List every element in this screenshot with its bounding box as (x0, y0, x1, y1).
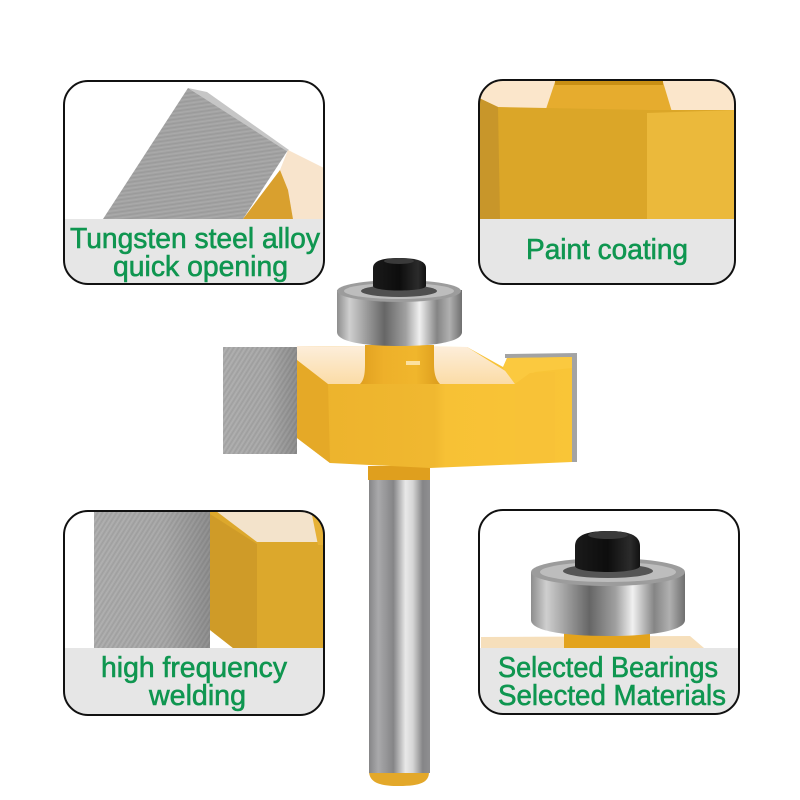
hex bolt (373, 258, 426, 290)
caption: high frequency welding: high frequency (101, 652, 287, 684)
panel: paint coating (479, 80, 735, 284)
caption: tungsten steel alloy quick opening: quick opening (113, 251, 288, 283)
panel: tungsten steel alloy (64, 81, 324, 284)
router bit product (223, 258, 577, 786)
caption: high frequency welding (101, 652, 287, 712)
bearing close-up (531, 531, 685, 636)
yellow neck (360, 345, 440, 384)
panel: high frequency welding (64, 511, 324, 715)
caption: selected bearings selected materials: Selected Bearings (498, 652, 718, 684)
caption: selected bearings selected materials: Selected Materials (498, 680, 726, 712)
yellow neck close-up (545, 82, 672, 112)
yellow body corner (210, 511, 324, 648)
caption: tungsten steel alloy quick opening (70, 223, 320, 283)
cream body top (481, 636, 704, 648)
carbide blade close-up (103, 88, 288, 219)
yellow neck (564, 632, 650, 648)
bearing (337, 258, 462, 346)
shank (368, 466, 430, 786)
caption: tungsten steel alloy quick opening: Tungsten steel alloy (70, 223, 320, 255)
caption: selected bearings selected materials (498, 652, 726, 712)
yellow painted body (479, 98, 735, 219)
caption: paint coating: Paint coating (526, 234, 688, 266)
yellow cutter body (297, 346, 572, 468)
left carbide tip (223, 347, 297, 454)
caption: high frequency welding: welding (148, 680, 246, 712)
carbide weld close-up (94, 511, 210, 648)
panel: selected bearings (479, 510, 739, 714)
right carbide tip (505, 353, 577, 462)
